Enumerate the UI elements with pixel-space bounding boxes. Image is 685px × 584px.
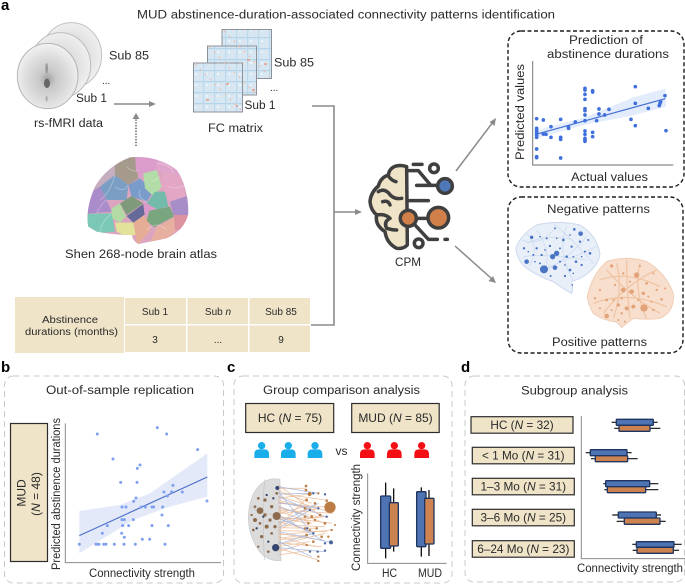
table: abstinence durations <box>15 297 310 353</box>
table: abstinence durations: durations (months) <box>25 327 118 338</box>
box plot: subgroups <box>581 416 685 559</box>
label: ellipsis FC: ... <box>270 83 278 94</box>
panel: prediction of abstinence durations <box>508 31 684 187</box>
label box: <1 Mo: < 1 Mo (N = 31) <box>482 448 565 462</box>
label box: <1 Mo <box>472 447 574 464</box>
axis label: connectivity strength: Connectivity strength <box>577 563 683 575</box>
icons: HC people <box>254 442 322 458</box>
panel: c <box>227 359 452 583</box>
arrow: fMRI to FC matrix <box>114 101 156 107</box>
arrow: CPM to prediction <box>456 118 496 171</box>
label box: MUD N = 48: MUD <box>14 479 28 507</box>
label: Shen 268-node brain atlas: Shen 268-node brain atlas <box>65 249 217 261</box>
panel letter b: b <box>1 359 10 376</box>
icon: rs-fMRI brain stack <box>17 23 102 109</box>
panel: a <box>1 0 684 353</box>
heading: abstinence durations: abstinence durations <box>547 49 669 61</box>
axis label: MUD: MUD <box>418 568 442 580</box>
icons: MUD people <box>360 442 429 458</box>
panel: d <box>461 359 685 582</box>
label: FC matrix: FC matrix <box>208 123 263 135</box>
axis label: predicted values: Predicted values <box>515 64 527 160</box>
chart: connectome <box>248 479 336 562</box>
scatter chart: prediction <box>533 61 673 165</box>
heading: out-of-sample replication: Out-of-sample replication <box>46 385 194 397</box>
box plot: HC vs MUD <box>368 473 447 563</box>
heading: positive patterns: Positive patterns <box>552 337 647 349</box>
heading: group comparison analysis: Group comparison analysis <box>263 385 420 397</box>
arrow: atlas to FC (dotted) <box>132 113 140 146</box>
label: Sub 1: Sub 1 <box>76 93 107 105</box>
axis label: actual values: Actual values <box>571 172 648 184</box>
label: Sub 1 FC: Sub 1 <box>244 100 276 112</box>
icon: Shen atlas brain <box>88 157 188 244</box>
label box: MUD N = 48 <box>10 424 48 562</box>
label box: 6-24 Mo: 6–24 Mo (N = 23) <box>477 542 569 556</box>
label box: HC <box>246 404 334 432</box>
arrow: CPM to patterns <box>455 246 496 283</box>
label box: MUD: MUD (N = 85) <box>358 411 433 425</box>
label box: 1-3 Mo: 1–3 Mo (N = 31) <box>481 480 566 494</box>
axis label: predicted abstinence durations: Predicted abstinence durations <box>51 418 63 570</box>
panel letter c: c <box>227 359 235 376</box>
icon: FC matrix stack <box>194 30 272 112</box>
panel letter d: d <box>461 359 470 376</box>
table: abstinence durations: Abstinence <box>42 315 98 326</box>
label: ellipsis: ... <box>102 76 110 87</box>
table: abstinence durations: 9 <box>278 335 284 346</box>
label box: 3-6 Mo: 3–6 Mo (N = 25) <box>481 510 566 524</box>
icon: negative pattern brain <box>516 222 600 293</box>
arrow: connector to CPM <box>311 106 362 325</box>
label: Sub 85 FC: Sub 85 <box>274 58 314 70</box>
label: Sub 85: Sub 85 <box>109 50 149 62</box>
icon: positive pattern brain <box>587 258 673 327</box>
axis label: HC: HC <box>382 568 397 580</box>
label box: MUD <box>352 404 439 432</box>
label box: HC: HC (N = 75) <box>258 411 322 425</box>
axis label: connectivity strength: Connectivity strength <box>89 568 195 580</box>
title: MUD abstinence-duration-associated connectivity patterns identification <box>137 10 555 22</box>
table: abstinence durations: Sub 1 <box>142 307 169 318</box>
panel: b <box>1 359 224 583</box>
label: vs: vs <box>336 446 348 458</box>
heading: prediction: Prediction of <box>569 35 644 47</box>
table: abstinence durations: 3 <box>152 335 158 346</box>
label box: HC N=32 <box>471 417 573 433</box>
label: CPM: CPM <box>395 257 421 269</box>
scatter chart: replication <box>65 423 221 563</box>
icon: CPM brain circuit <box>370 164 452 249</box>
heading: subgroup analysis: Subgroup analysis <box>521 386 628 398</box>
axis label: connectivity strength: Connectivity strength <box>351 464 363 571</box>
label box: HC N=32: HC (N = 32) <box>490 418 554 432</box>
table: abstinence durations: Sub 85 <box>265 307 297 318</box>
panel: negative and positive patterns <box>508 197 683 353</box>
label: rs-fMRI data: rs-fMRI data <box>34 118 104 130</box>
table: abstinence durations: ... <box>214 335 222 346</box>
label box: MUD N = 48: (N = 48) <box>29 472 43 516</box>
table: abstinence durations: Sub n <box>205 307 232 318</box>
heading: negative patterns: Negative patterns <box>547 204 650 216</box>
